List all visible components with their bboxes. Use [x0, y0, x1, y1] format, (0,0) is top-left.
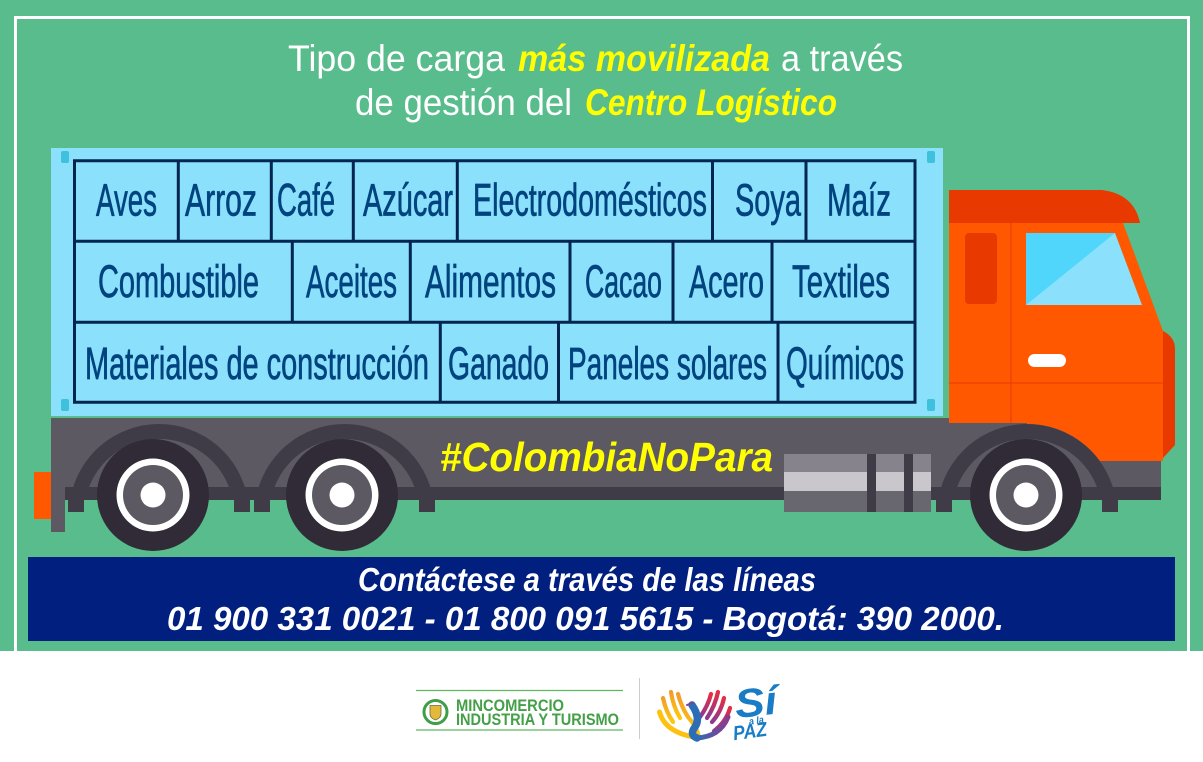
cargo labels: [85, 174, 904, 389]
cargo labels: Aceites: [306, 256, 397, 307]
truck: [34, 190, 1175, 551]
cargo labels: Maíz: [827, 174, 891, 226]
cargo labels: Electrodomésticos: [473, 174, 707, 226]
cargo labels: Paneles solares: [568, 338, 767, 389]
cargo labels: Soya: [735, 174, 802, 226]
icon: hands and dove: [660, 692, 730, 738]
cab bumper: [1163, 331, 1175, 458]
cargo labels: Textiles: [792, 256, 890, 307]
wheel 1: [97, 439, 209, 551]
contact text: Contáctese a través de las líneas: [358, 561, 816, 598]
door handle: [1028, 354, 1066, 367]
contact text: 01 900 331 0021 - 01 800 091 5615 - Bogotá: 390 2000.: [167, 600, 1004, 637]
cargo labels: Aves: [96, 174, 157, 226]
divider: [639, 678, 640, 739]
wheel 3: [970, 439, 1082, 551]
cargo labels: Café: [277, 174, 335, 226]
cargo labels: Químicos: [786, 338, 904, 389]
title: [288, 38, 903, 123]
cab vent: [965, 233, 997, 304]
title: a través: [781, 38, 903, 79]
logo text: [456, 697, 619, 729]
cargo labels: Alimentos: [425, 256, 556, 307]
title: de gestión del: [355, 82, 572, 123]
hashtag: #ColombiaNoPara: [440, 434, 773, 480]
cab roof: [949, 190, 1140, 223]
panel: cargo container: [51, 148, 943, 416]
front fender: [936, 424, 1118, 512]
exhaust tank: [784, 454, 931, 512]
rear fender 2: [254, 424, 435, 512]
logo: Sí a la Paz: [660, 678, 784, 745]
panel: contact band: [28, 557, 1175, 641]
cargo labels: Acero: [689, 256, 764, 307]
cargo grid lines: [74, 161, 915, 402]
cargo labels: Azúcar: [363, 174, 453, 226]
cab body: [949, 223, 1163, 461]
wheel 2: [286, 439, 398, 551]
title: Centro Logístico: [585, 82, 837, 123]
contact text: [167, 561, 1004, 637]
logo wordmark: [732, 678, 784, 745]
cargo labels: Combustible: [98, 256, 259, 307]
cargo labels: Cacao: [585, 256, 662, 307]
title: más movilizada: [518, 38, 770, 79]
logo wordmark: PAZ: [732, 719, 769, 745]
cargo labels: Arroz: [185, 174, 257, 226]
logo wordmark: a la: [748, 715, 765, 728]
container rivets: [61, 151, 935, 411]
cab door lines: [949, 223, 1163, 423]
cargo labels: Ganado: [448, 338, 549, 389]
logo text: INDUSTRIA Y TURISMO: [456, 711, 619, 729]
logo text: MINCOMERCIO: [456, 697, 564, 715]
logo: Mincomercio: [416, 690, 623, 730]
logo wordmark: Sí: [733, 678, 784, 727]
icon: coat of arms: [424, 700, 447, 724]
cab window: [1026, 233, 1142, 305]
rear fender 1: [68, 424, 250, 512]
truck chassis: [51, 418, 1161, 532]
rear light: [34, 472, 51, 519]
title: Tipo de carga: [288, 38, 505, 79]
cargo labels: Materiales de construcción: [85, 338, 429, 389]
